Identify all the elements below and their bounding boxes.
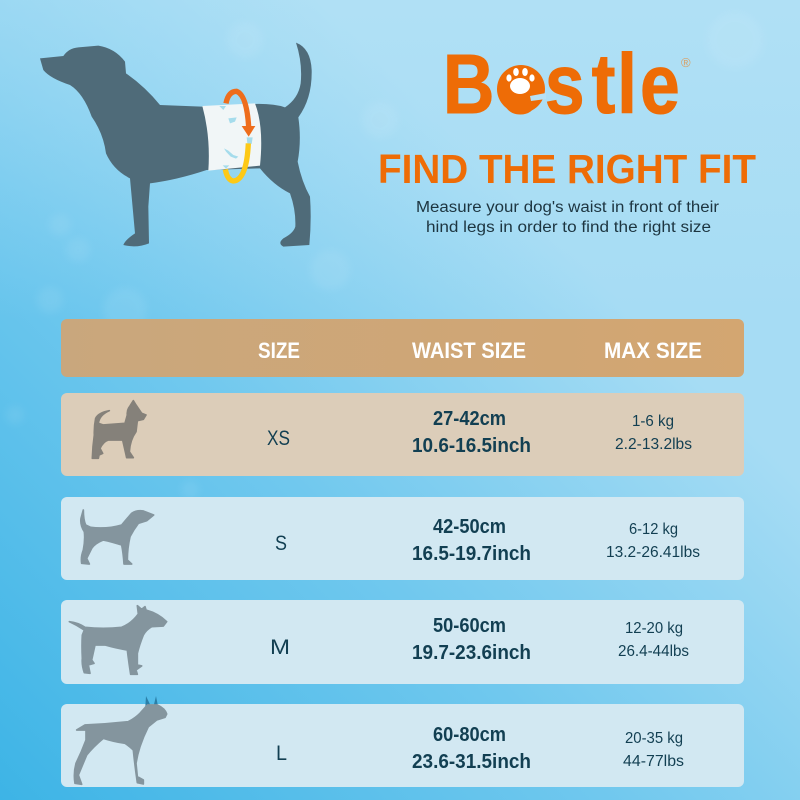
max size: 1-6 kg <box>632 413 674 430</box>
logo wordmark: Bestle <box>443 36 680 131</box>
subtitle: Measure your dog's waist in front of their <box>416 199 719 216</box>
logo e notch <box>530 93 546 101</box>
size label: L <box>276 742 287 765</box>
row: L <box>61 696 744 787</box>
dog silhouette <box>40 43 312 247</box>
table header: MAX SIZE <box>604 338 702 363</box>
logo e disk <box>497 65 545 113</box>
waist size: 16.5-19.7inch <box>412 543 531 565</box>
row: XS <box>61 393 744 476</box>
max size <box>623 730 684 770</box>
row: S <box>61 497 744 580</box>
waist size: 27-42cm <box>433 408 506 430</box>
illustration: dog with belly band <box>40 43 312 247</box>
icon: doberman ears <box>145 696 158 707</box>
belly band <box>202 103 261 171</box>
max size: 20-35 kg <box>625 730 683 747</box>
subtitle: hind legs in order to find the right size <box>426 219 711 236</box>
waist size: 42-50cm <box>433 516 506 538</box>
waist size <box>412 516 531 565</box>
title: FIND THE RIGHT FIT <box>378 146 756 192</box>
size label: M <box>270 636 290 659</box>
max size <box>615 413 692 453</box>
table header: WAIST SIZE <box>412 338 526 363</box>
table header: SIZE <box>258 338 300 363</box>
max size: 13.2-26.41lbs <box>606 544 700 561</box>
max size: 12-20 kg <box>625 620 683 637</box>
logo paw <box>506 68 535 94</box>
waist size: 19.7-23.6inch <box>412 642 531 664</box>
subtitle <box>416 199 719 236</box>
max size: 44-77lbs <box>623 753 684 770</box>
table header <box>61 319 744 377</box>
waist size <box>412 408 531 457</box>
yellow arrow arc <box>225 143 248 181</box>
waist size <box>412 615 531 664</box>
icon: doberman <box>74 705 167 784</box>
orange arrow head <box>242 126 255 137</box>
waist size: 10.6-16.5inch <box>412 435 531 457</box>
waist size: 23.6-31.5inch <box>412 751 531 773</box>
orange arrow arc <box>226 91 249 127</box>
max size <box>606 521 700 561</box>
max size <box>618 620 689 660</box>
max size: 26.4-44lbs <box>618 643 689 660</box>
icon: chihuahua <box>92 401 146 458</box>
size label: S <box>275 532 287 555</box>
waist size: 50-60cm <box>433 615 506 637</box>
row: M <box>61 600 744 684</box>
waist size: 60-80cm <box>433 724 506 746</box>
registered mark: ® <box>681 55 691 70</box>
logo <box>443 36 691 131</box>
size label: XS <box>267 427 290 450</box>
icon: bull terrier <box>69 606 167 674</box>
max size: 6-12 kg <box>629 521 678 538</box>
waist size <box>412 724 531 773</box>
max size: 2.2-13.2lbs <box>615 436 692 453</box>
icon: beagle <box>81 510 154 564</box>
